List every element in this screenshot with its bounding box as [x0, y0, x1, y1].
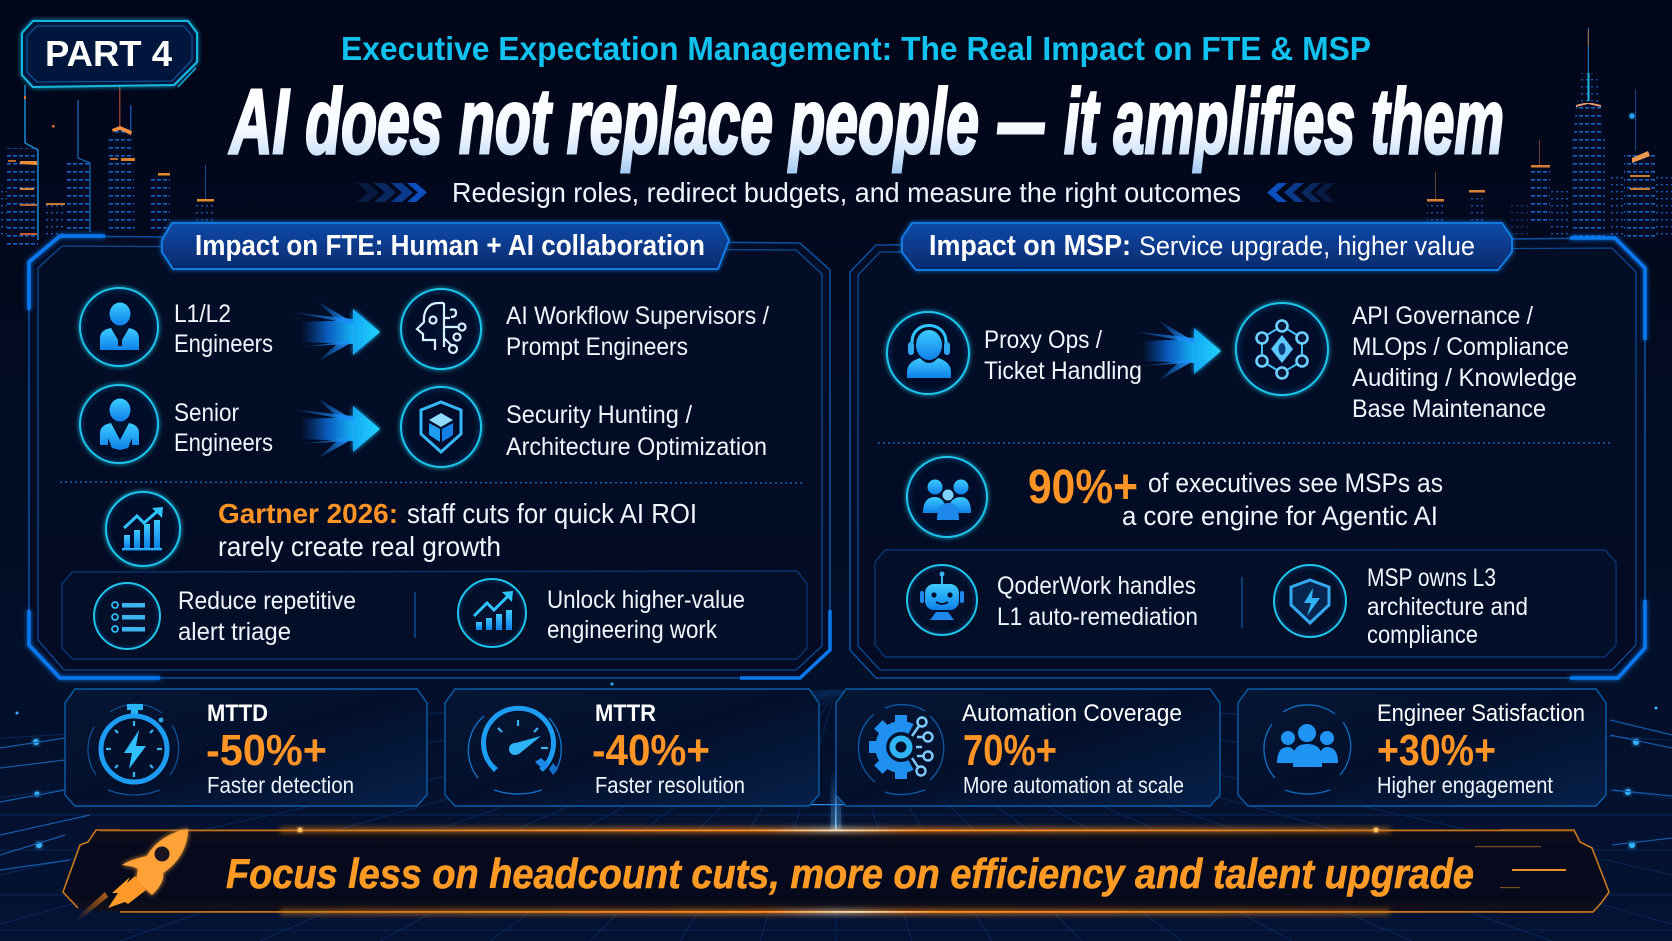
stat: 90%+: 90%+	[1028, 461, 1138, 514]
KPI card: engineer satisfaction	[1238, 689, 1606, 806]
label: MSP owns L3: compliance	[1367, 621, 1478, 649]
label: unlock work: engineering work	[547, 616, 717, 644]
badge: PART 4: PART 4	[45, 33, 172, 74]
panel heading	[162, 223, 729, 269]
title: —	[998, 71, 1044, 173]
row: L1/L2 engineers	[80, 288, 769, 369]
label: proxy ops: Proxy Ops /	[984, 326, 1102, 354]
KPI text: engineer satisfaction: Engineer Satisfaction	[1377, 700, 1585, 727]
icon: senior engineer	[80, 385, 158, 463]
label: QoderWork: QoderWork handles	[997, 572, 1196, 600]
KPI card: automation coverage	[836, 689, 1220, 806]
label: reduce triage: alert triage	[178, 618, 291, 646]
title: AI does not replace people	[229, 71, 979, 173]
row: senior engineers	[80, 385, 767, 467]
label: AI workflow supervisors: Prompt Engineers	[506, 333, 688, 361]
icon: gear with nodes	[858, 705, 944, 795]
panel heading: Service upgrade, higher value	[1139, 231, 1475, 261]
KPI text: MTTR: MTTR	[595, 700, 656, 727]
tagline text: Redesign roles, redirect budgets, and measure the right outcomes	[452, 177, 1241, 208]
label: MSP owns L3: architecture and	[1367, 593, 1528, 621]
icon: right chevrons	[1267, 183, 1335, 202]
label: proxy ops: Ticket Handling	[984, 357, 1142, 385]
callout text: of executives see MSPs as	[1148, 468, 1443, 498]
KPI text: MTTR	[592, 700, 745, 798]
background: perspective grid floor	[0, 690, 1672, 941]
KPI text: MTTD	[206, 700, 354, 798]
callout: 90% of executives	[907, 457, 1443, 537]
arrow	[290, 398, 380, 459]
banner: call to action	[63, 828, 1609, 920]
KPI text: automation coverage: More automation at scale	[963, 772, 1184, 798]
panel heading: Impact on MSP:	[929, 230, 1131, 262]
callout text: staff cuts for quick AI ROI	[407, 498, 697, 529]
label: API governance: Base Maintenance	[1352, 395, 1546, 423]
panel frame	[850, 238, 1645, 678]
icon: compliance shield	[1274, 565, 1346, 637]
badge: PART 4	[22, 21, 197, 87]
icon: left chevrons	[357, 183, 427, 202]
label: API governance: API Governance /	[1352, 302, 1533, 330]
label: MSP owns L3: MSP owns L3	[1367, 564, 1496, 592]
background: glowing network nodes	[0, 682, 1672, 870]
icon: team	[1264, 705, 1351, 794]
banner text: Focus less on headcount cuts, more on efficiency and talent upgrade	[226, 850, 1474, 897]
icon: headset agent	[887, 312, 969, 394]
KPI text: automation coverage: Automation Coverage	[962, 700, 1182, 727]
arrow	[290, 301, 380, 362]
row: proxy ops	[887, 302, 1577, 423]
KPI card: MTTD	[65, 689, 427, 806]
label: AI workflow supervisors: AI Workflow Supervisors /	[506, 302, 769, 330]
label: API governance: Auditing / Knowledge	[1352, 364, 1577, 392]
tagline	[357, 177, 1335, 208]
icon: rocket	[76, 829, 188, 920]
KPI text: MTTD: MTTD	[207, 700, 268, 727]
label: senior engineers: Senior	[174, 399, 239, 427]
arrow	[1131, 320, 1221, 381]
label: security hunting: Security Hunting /	[506, 401, 692, 429]
label: unlock work: Unlock higher-value	[547, 586, 745, 614]
sub-panel: MSP responsibilities	[875, 550, 1616, 657]
subtitle: Executive Expectation Management: The Real Impact on FTE & MSP	[341, 30, 1371, 67]
icon: growth chart	[106, 492, 180, 566]
icon: network hexagon	[1236, 303, 1328, 395]
KPI card: MTTR	[445, 689, 819, 806]
icon: executive group	[907, 457, 987, 537]
KPI text: MTTR: Faster resolution	[595, 772, 745, 798]
panel: impact on MSP	[850, 223, 1645, 678]
KPI text: MTTR: -40%+	[592, 726, 710, 775]
label: reduce triage: Reduce repetitive	[178, 587, 356, 615]
icon: upward chart	[458, 579, 526, 647]
KPI text: MTTD: -50%+	[206, 726, 327, 775]
background: right city skyline	[1427, 28, 1672, 240]
background: left city skyline	[0, 85, 214, 245]
KPI text: automation coverage: 70%+	[963, 726, 1057, 775]
label: senior engineers: Engineers	[174, 429, 273, 457]
icon: security shield	[401, 387, 481, 467]
icon: checklist	[94, 583, 160, 649]
KPI text: engineer satisfaction	[1377, 700, 1585, 798]
KPI text: automation coverage	[962, 700, 1184, 798]
icon: gauge	[468, 708, 561, 794]
callout text: a core engine for Agentic AI	[1122, 501, 1438, 531]
panel heading	[902, 223, 1512, 270]
sub-panel: FTE benefits	[62, 571, 807, 659]
icon: robot	[907, 565, 977, 635]
label: security hunting: Architecture Optimization	[506, 433, 767, 461]
label: L1/L2 engineers: L1/L2	[174, 300, 231, 328]
banner glow lines	[100, 828, 1593, 914]
icon: AI head	[401, 289, 481, 369]
callout text: Gartner 2026:	[218, 498, 398, 529]
callout text: rarely create real growth	[218, 531, 501, 562]
KPI text: engineer satisfaction: Higher engagement	[1377, 772, 1554, 798]
label: L1/L2 engineers: Engineers	[174, 330, 273, 358]
panel heading: Impact on FTE: Human + AI collaboration	[195, 230, 705, 262]
panel frame	[29, 236, 830, 678]
KPI text: MTTD: Faster detection	[207, 772, 354, 798]
panel: impact on FTE	[29, 223, 830, 678]
label: API governance: MLOps / Compliance	[1352, 333, 1569, 361]
KPI text: engineer satisfaction: +30%+	[1377, 726, 1496, 775]
icon: stopwatch	[88, 704, 179, 795]
background: vertical light beam	[790, 770, 882, 830]
icon: engineer	[80, 288, 158, 366]
callout: Gartner 2026	[106, 492, 697, 566]
label: QoderWork: L1 auto-remediation	[997, 603, 1198, 631]
